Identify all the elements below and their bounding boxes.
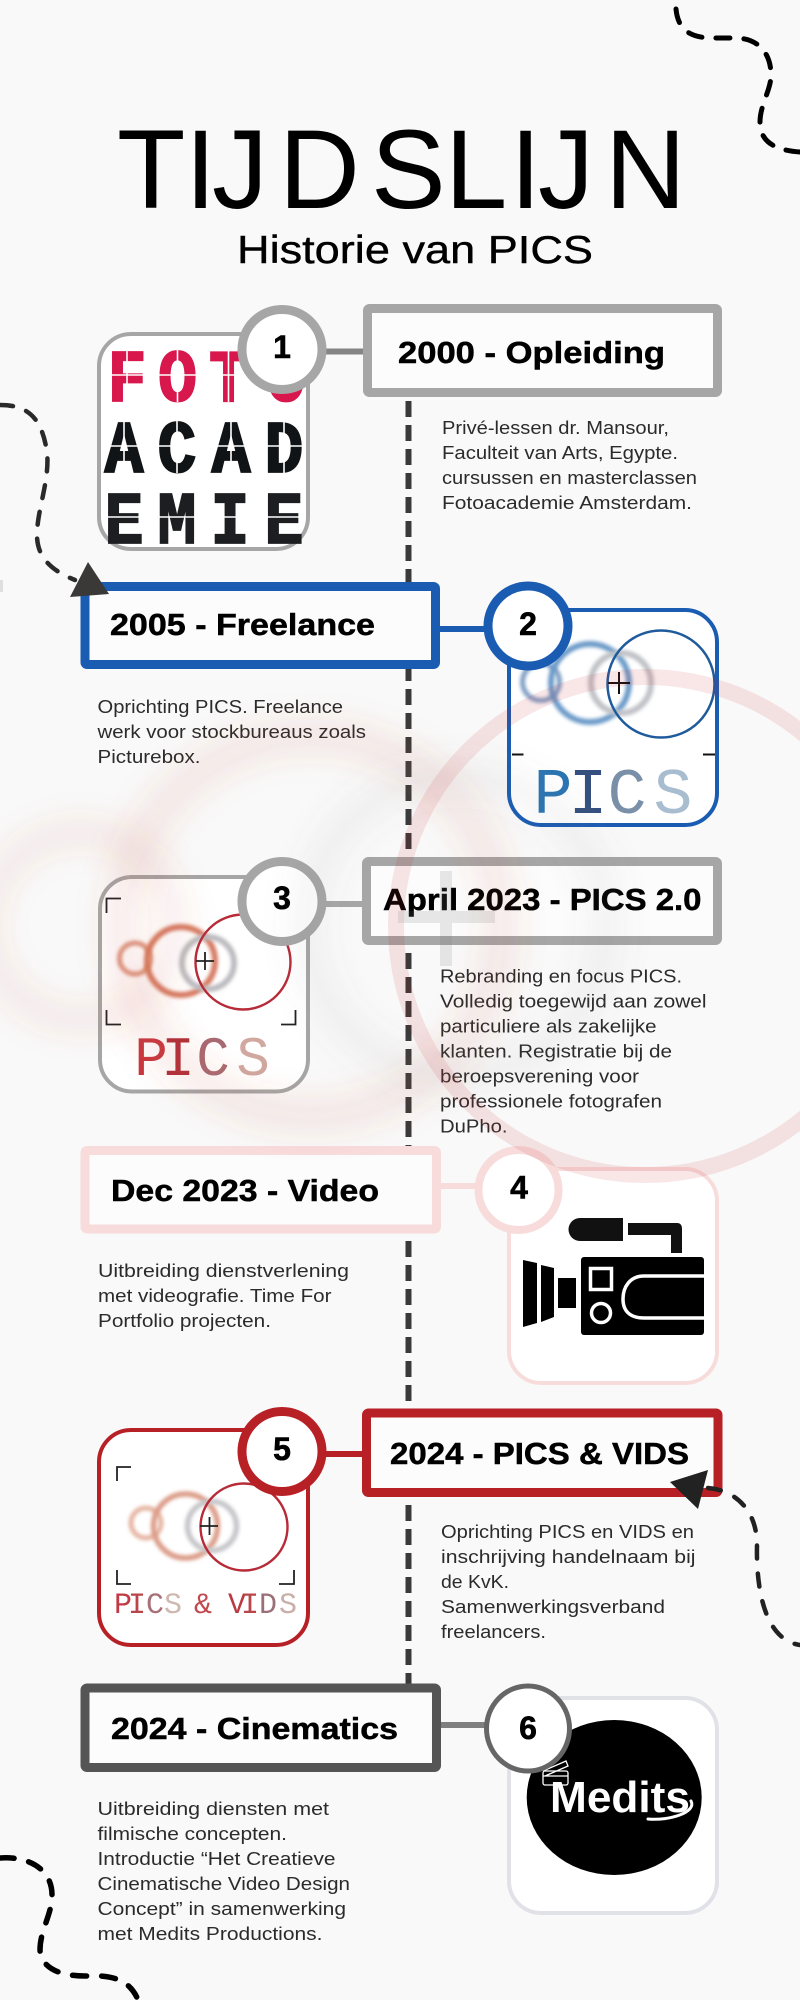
description 5 [441, 1521, 696, 1642]
description 3: DuPho. [440, 1116, 508, 1136]
heading box 6 [85, 1688, 436, 1768]
number badge 1 [242, 310, 322, 390]
heading box 2 [85, 586, 436, 664]
description 6: Cinematische Video Design [98, 1873, 350, 1894]
logo card: PICS red: C [196, 1028, 230, 1092]
number badge 3: 3 [273, 880, 291, 916]
description 1: cursussen en masterclassen [442, 467, 697, 488]
logo card: Foto Academie: ACAD [104, 410, 304, 494]
description 1: Fotoacademie Amsterdam. [442, 492, 692, 513]
connector 1 [326, 348, 364, 354]
panel: April 2023 PICS 2.0 [100, 862, 718, 1136]
logo card: PICS & VIDS: I [128, 1589, 146, 1623]
description 1 [442, 417, 697, 513]
logo card: Foto Academie: FOTO [107, 339, 306, 423]
heading box 4: Dec 2023 - Video [111, 1173, 379, 1208]
logo card: Foto Academie [99, 334, 308, 565]
logo card: Medits: Medits [550, 1773, 690, 1822]
number badge 2: 2 [519, 606, 537, 642]
description 3: klanten. Registratie bij de [440, 1040, 672, 1062]
description 5: freelancers. [441, 1621, 546, 1642]
description 4 [98, 1260, 349, 1331]
description 1: Faculteit van Arts, Egypte. [442, 442, 678, 463]
panel: 2005 Freelance [85, 586, 717, 833]
logo card: Foto Academie: EMIE [104, 481, 304, 565]
title: TIJDSLIJN [117, 107, 686, 232]
logo card: PICS blue: S [653, 759, 693, 833]
card: video camera icon [509, 1169, 717, 1383]
logo card: Medits [509, 1698, 717, 1913]
background watermark logo [0, 580, 800, 1175]
logo card: PICS red: P [134, 1028, 168, 1092]
description 3: Volledig toegewijd aan zowel [440, 990, 706, 1012]
logo card: PICS & VIDS: S [164, 1589, 182, 1623]
number badge 4: 4 [510, 1170, 528, 1206]
number badge 6 [486, 1686, 570, 1771]
decorative dashed curve: bottom left [0, 1858, 138, 2000]
description 5: Samenwerkingsverband [441, 1596, 665, 1617]
logo card: PICS & VIDS: D [259, 1589, 277, 1623]
logo card: PICS blue: I [568, 759, 608, 833]
description 6: filmische concepten. [98, 1823, 287, 1844]
panel: 2024 Cinematics [85, 1686, 717, 1944]
heading box 6: 2024 - Cinematics [111, 1711, 398, 1746]
panel: 2000 Opleiding [99, 308, 718, 565]
description 3 [440, 966, 706, 1136]
logo card: PICS red: S [236, 1028, 270, 1092]
description 6: Introductie “Het Creatieve [98, 1848, 336, 1869]
number badge 5 [242, 1412, 322, 1492]
heading box 1 [368, 308, 718, 392]
heading box 5: 2024 - PICS & VIDS [390, 1436, 689, 1471]
logo card: PICS & VIDS: I [241, 1589, 259, 1623]
number badge 5: 5 [273, 1431, 291, 1467]
description 6 [98, 1798, 350, 1944]
logo card: PICS red [100, 877, 308, 1092]
heading box 5 [366, 1413, 718, 1492]
number badge 3 [242, 862, 322, 942]
number badge 1: 1 [273, 329, 291, 365]
decorative dashed curve: top right [676, 9, 800, 152]
number badge 2 [488, 586, 568, 666]
logo card: PICS & VIDS: S [279, 1589, 297, 1623]
logo card: PICS blue: C [607, 759, 647, 833]
dashed arrow: right to box 5 [670, 1470, 800, 1645]
description 2 [96, 696, 366, 767]
panel: Dec 2023 Video [85, 1150, 717, 1383]
description 6: Concept” in samenwerking [98, 1898, 346, 1919]
logo card: PICS blue: P [533, 759, 573, 833]
description 6: met Medits Productions. [98, 1923, 322, 1944]
connector 2 [440, 626, 485, 632]
heading box 2: 2005 - Freelance [110, 607, 375, 642]
connector 6 [441, 1722, 485, 1728]
description 1: Privé-lessen dr. Mansour, [442, 417, 669, 438]
connector 3 [326, 901, 363, 907]
logo card: PICS red: I [161, 1028, 195, 1092]
description 6: Uitbreiding diensten met [98, 1798, 330, 1819]
panel: 2024 PICS & VIDS [99, 1412, 718, 1645]
logo card: PICS & VIDS: P [114, 1589, 132, 1623]
connector 4 [441, 1183, 475, 1189]
description 3: Rebranding en focus PICS. [440, 966, 682, 986]
logo card: PICS & VIDS [99, 1430, 308, 1645]
logo card: PICS & VIDS: & [194, 1589, 212, 1623]
heading box 4 [85, 1150, 436, 1229]
description 4: Uitbreiding dienstverlening [98, 1260, 349, 1281]
logo card: PICS & VIDS: C [146, 1589, 164, 1623]
description 4: Portfolio projecten. [98, 1310, 271, 1331]
dashed arrow: left to box 2 [0, 405, 109, 597]
description 3: beroepsverening voor [440, 1066, 639, 1086]
heading box 3 [366, 862, 718, 940]
number badge 4 [478, 1150, 558, 1230]
logo card: PICS blue [509, 610, 717, 833]
description 5: inschrijving handelnaam bij [441, 1546, 696, 1567]
description 2: Picturebox. [98, 746, 200, 767]
description 5: Oprichting PICS en VIDS en [441, 1521, 694, 1542]
connector 5 [326, 1451, 363, 1457]
description 2: Oprichting PICS. Freelance [98, 696, 343, 717]
number badge 6: 6 [519, 1710, 537, 1746]
description 3: professionele fotografen [440, 1090, 662, 1112]
logo card: PICS & VIDS: V [228, 1589, 246, 1623]
description 2: werk voor stockbureaus zoals [96, 721, 366, 742]
description 5: de KvK. [441, 1571, 509, 1592]
subtitle: Historie van PICS [237, 229, 593, 272]
heading box 1: 2000 - Opleiding [398, 335, 665, 370]
description 4: met videografie. Time For [98, 1285, 332, 1306]
description 3: particuliere als zakelijke [440, 1016, 656, 1036]
heading box 3: April 2023 - PICS 2.0 [383, 882, 702, 917]
timeline spine [406, 401, 412, 1690]
